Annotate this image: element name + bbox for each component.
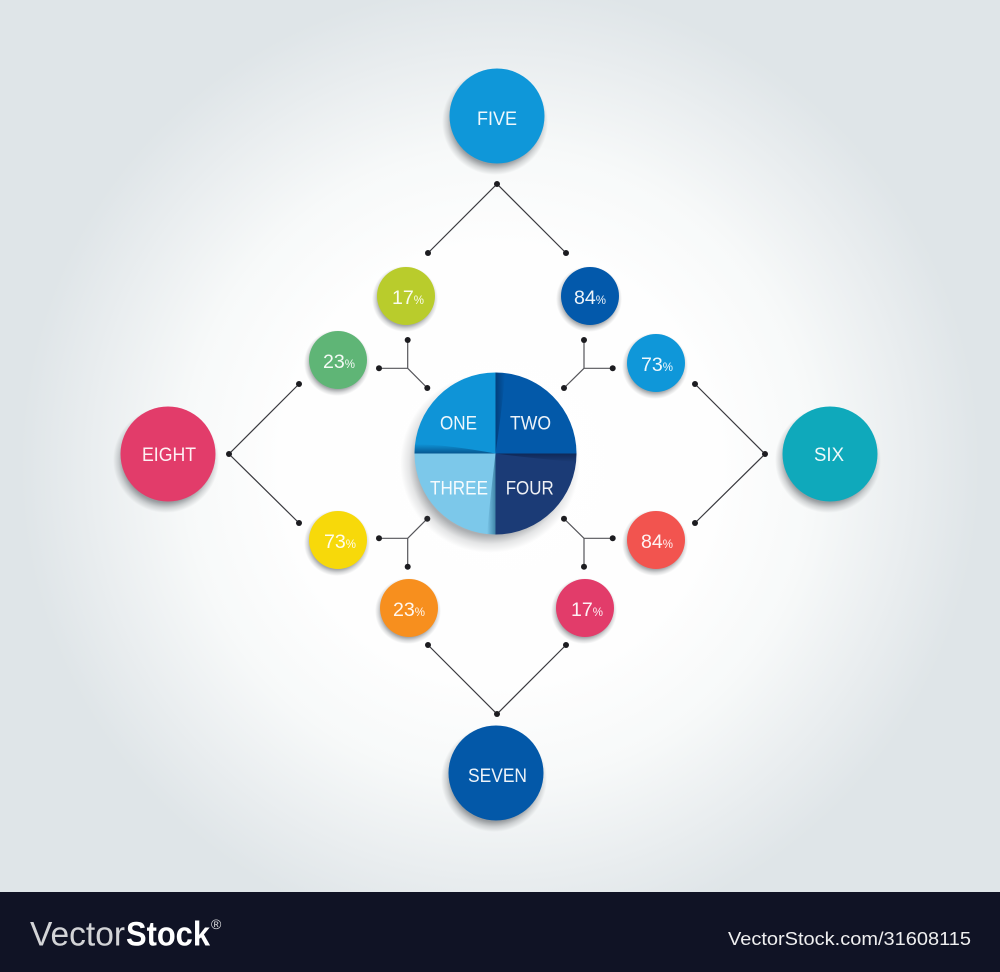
node: SIX [775,406,881,513]
badge: 84% dark blue: 84% [574,287,606,309]
connector: lower-left fork [376,516,430,570]
badge: 23% green [304,330,370,396]
connector: right branch from SIX [692,381,768,526]
footer logo: Stock [126,916,210,954]
footer image id: VectorStock.com/31608115 [728,929,971,949]
badge: 17% pink: 17% [571,599,603,621]
badge: 17% lime: 17% [392,287,424,309]
node: EIGHT: EIGHT [142,444,196,466]
badge: 23% green: 23% [323,351,355,373]
node: SEVEN: SEVEN [468,765,527,787]
badge: 73% blue: 73% [641,354,673,376]
connector: left branch from EIGHT [226,381,302,526]
central pie chart [400,372,580,553]
connector: top branch from FIVE [425,181,569,256]
badge: 84% red: 84% [641,531,673,553]
node: SEVEN [441,726,547,832]
footer logo: ® [211,916,222,932]
node: FIVE [442,68,548,175]
node: EIGHT [113,406,219,513]
connector: lower-right fork [561,516,616,570]
badge: 23% orange [375,578,441,644]
segment: THREE [414,454,496,534]
badge: 84% dark blue [556,266,622,332]
badge: 73% yellow: 73% [324,531,356,553]
node: FIVE: FIVE [477,108,517,130]
badge: 73% blue [622,333,688,399]
connector: upper-right fork [561,337,616,391]
segment: ONE [414,372,496,454]
footer logo [30,916,222,954]
badge: 23% orange: 23% [393,599,425,621]
footer logo: Vector [30,916,125,954]
segment: TWO [496,372,576,454]
footer bar [0,892,1000,972]
segment: TWO: TWO [510,412,551,434]
badge: 17% lime [372,266,438,332]
connector: upper-left fork [376,337,430,391]
segment: THREE: THREE [430,478,488,500]
badge: 84% red [622,510,688,576]
segment: FOUR: FOUR [506,478,554,500]
badge: 17% pink [551,578,617,644]
node: SIX: SIX [814,444,844,466]
segment: ONE: ONE [440,412,477,434]
connector: bottom branch from SEVEN [425,642,569,717]
segment: FOUR [496,454,576,534]
badge: 73% yellow [304,510,370,576]
